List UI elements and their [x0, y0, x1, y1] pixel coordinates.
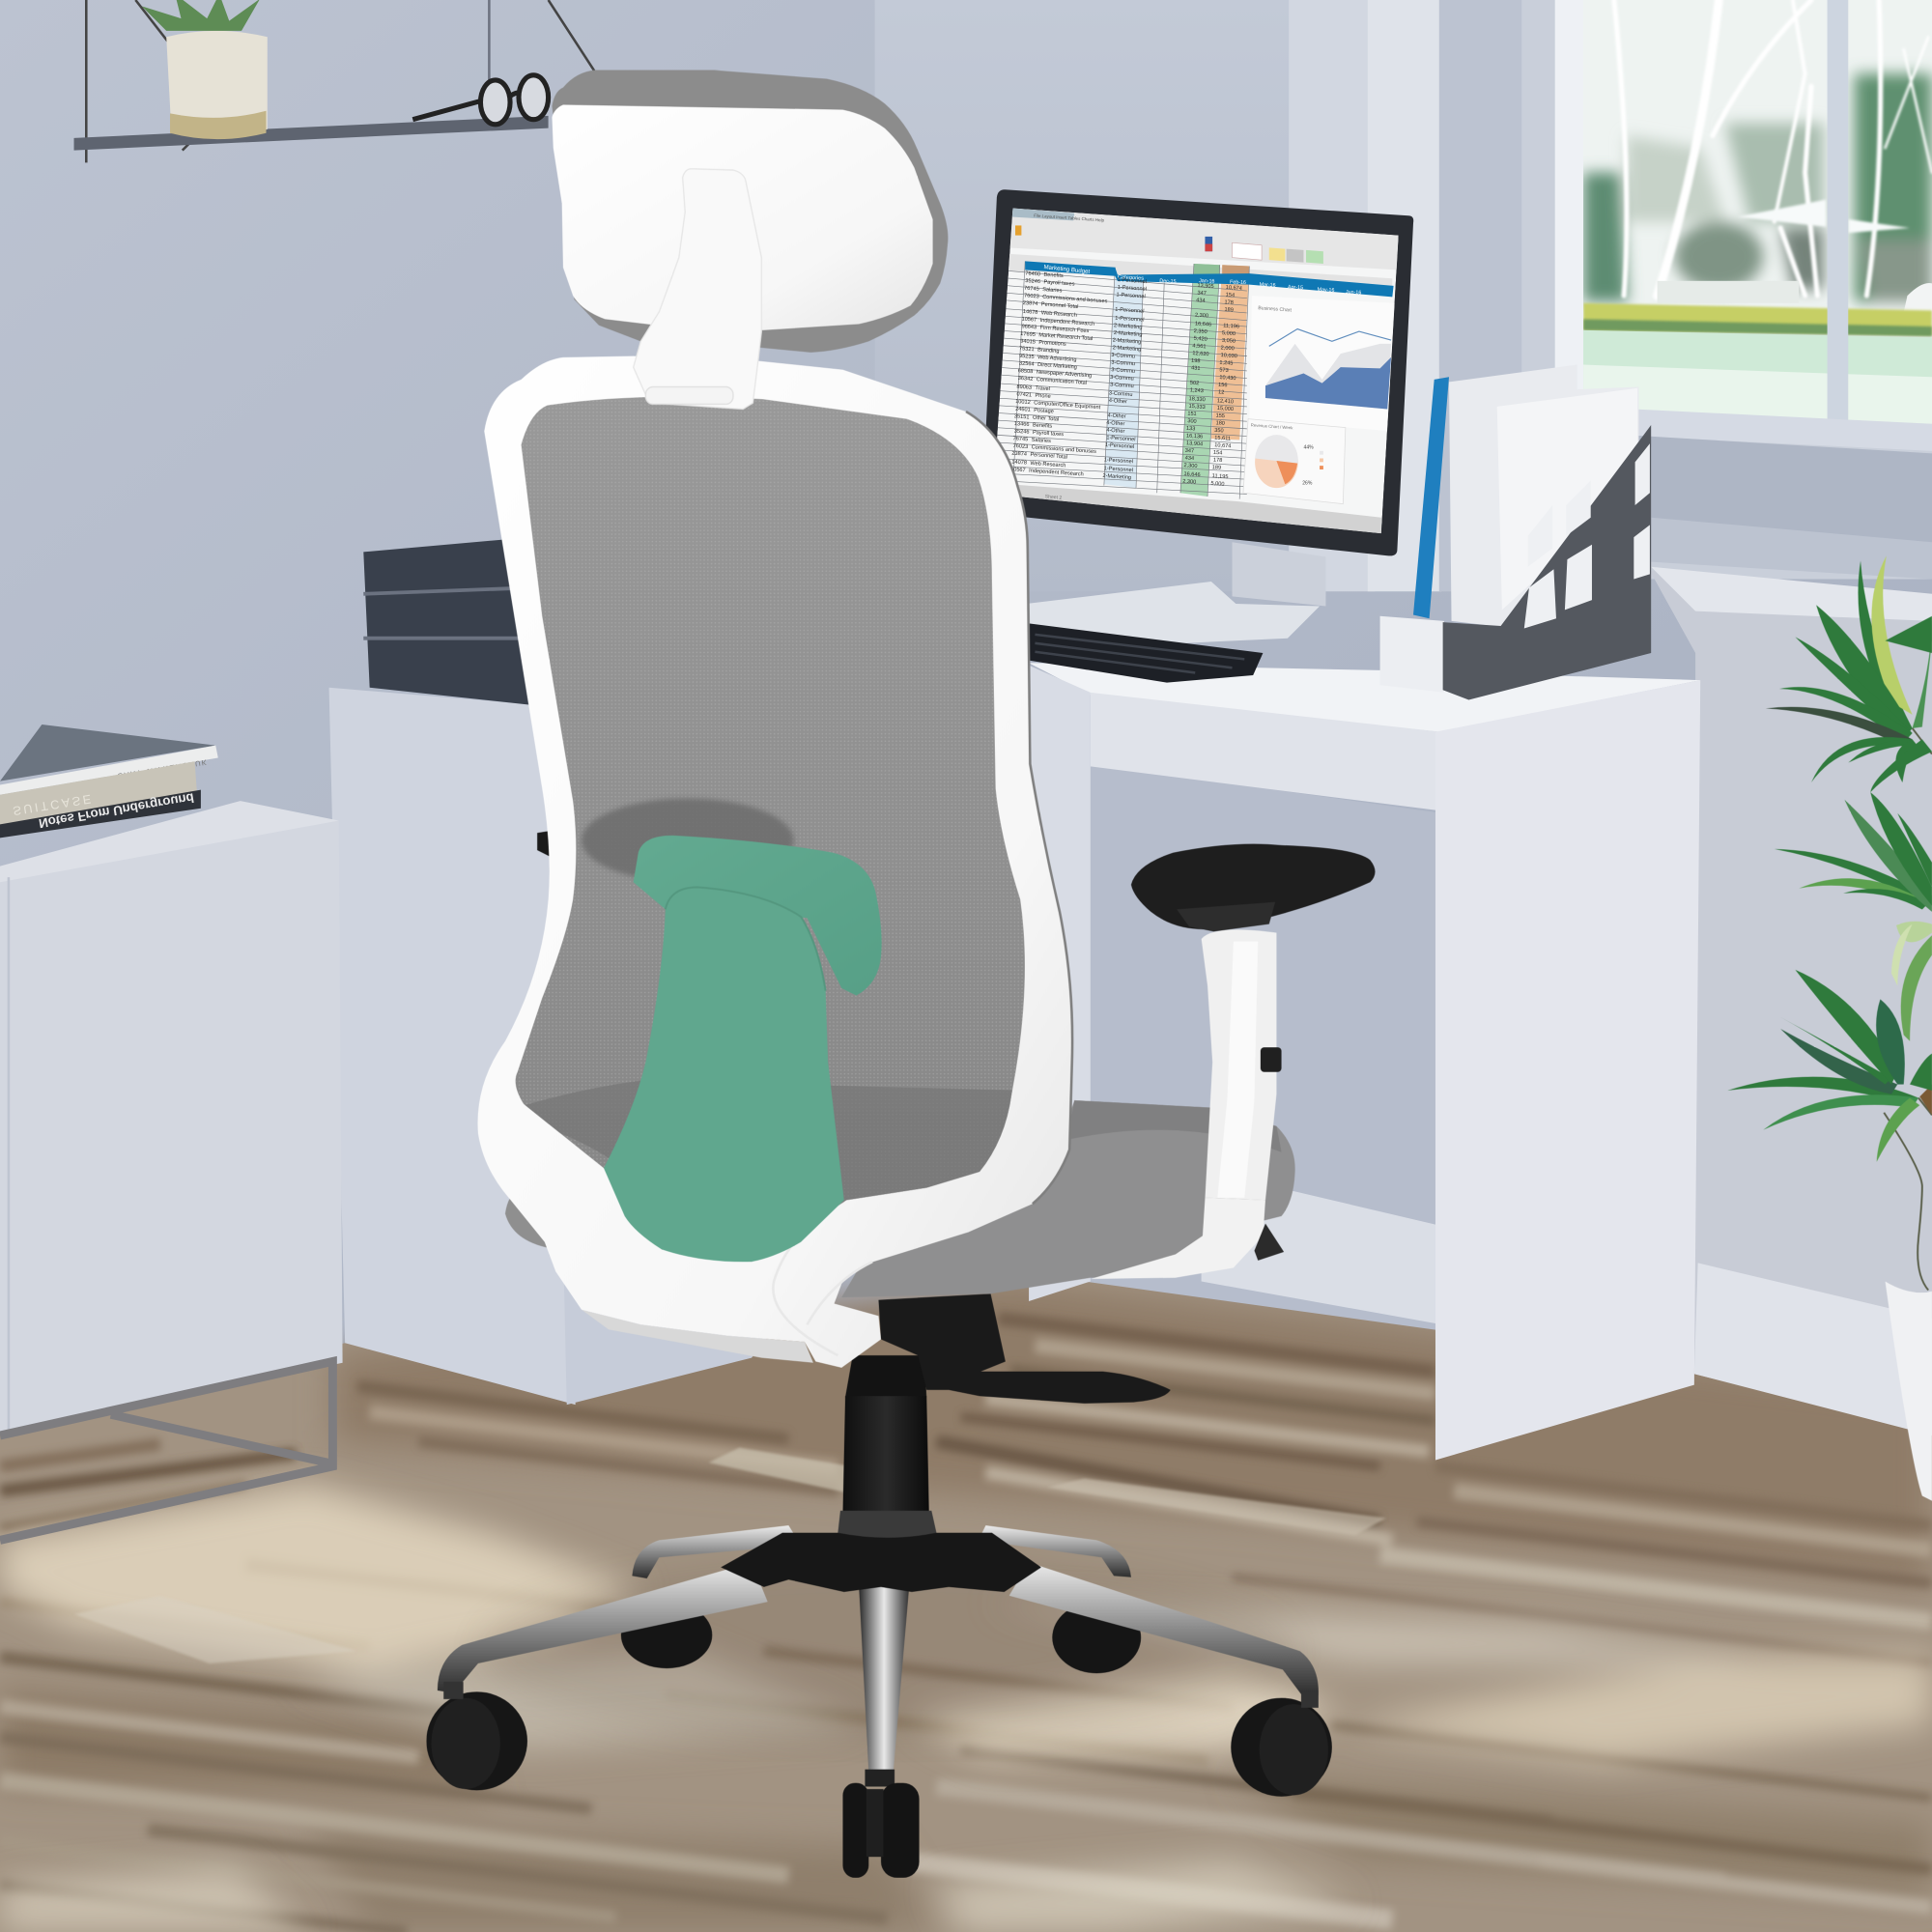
spreadsheet text: 36342 [1017, 376, 1033, 383]
desk [1029, 663, 1700, 1460]
desk organizer [1380, 365, 1651, 699]
spreadsheet text: Firm Research Fees [1039, 326, 1090, 334]
spreadsheet grid [996, 261, 1249, 499]
spreadsheet text: 3-Commu [1110, 375, 1134, 383]
spreadsheet text: 1,243 [1190, 387, 1204, 394]
spreadsheet text: 502 [1190, 381, 1199, 386]
left caster [426, 1682, 527, 1790]
metal legs [0, 1361, 332, 1540]
shell underside ribs [582, 1310, 813, 1363]
icon: potted plant [142, 0, 268, 139]
spreadsheet text: 1-Personnel [1118, 277, 1147, 285]
spreadsheet text: Web Advertising [1037, 355, 1077, 363]
middle leaf cluster [1775, 792, 1932, 942]
spreadsheet text: 156 [1218, 383, 1228, 388]
spreadsheet text: 11,195 [1212, 473, 1229, 480]
right caster [1231, 1690, 1332, 1797]
spreadsheet text: 2-Marketing [1114, 323, 1143, 330]
spreadsheet text: 155 [1215, 413, 1225, 419]
spreadsheet text: May-16 [1317, 287, 1335, 294]
arm post [1202, 929, 1276, 1200]
spreadsheet text: 10567 [1010, 467, 1026, 473]
spreadsheet text: Promotions [1038, 340, 1066, 348]
light plank ends [74, 1448, 1386, 1663]
spreadsheet text: 68508 [1017, 368, 1033, 375]
spreadsheet text: Market Research Total [1038, 332, 1093, 342]
spreadsheet text: 4-Other [1107, 412, 1126, 420]
spreadsheet text: 15,333 [1188, 404, 1206, 411]
spreadsheet text: 1-Personnel [1115, 307, 1145, 315]
spreadsheet text: 347 [1197, 290, 1207, 297]
stems [1884, 728, 1932, 1290]
shell crease [773, 1202, 872, 1355]
spreadsheet text: 35151 [1014, 413, 1030, 420]
book stack: Notes From Underground [38, 790, 195, 831]
spreadsheet text: 11,196 [1223, 323, 1239, 330]
seat seen through mesh [493, 1081, 1023, 1253]
seat [505, 1100, 1295, 1297]
spreadsheet text: 434 [1196, 298, 1206, 304]
magazines in desk: MIRROR LINE [1034, 739, 1050, 837]
spreadsheet text: Payroll taxes [1043, 279, 1075, 288]
icon: glasses [412, 75, 549, 125]
spreadsheet text: 10,674 [1226, 285, 1242, 292]
spreadsheet text: Other Total [1033, 415, 1059, 423]
spreadsheet text: 75321 [1019, 346, 1035, 353]
spreadsheet text: 18,330 [1188, 396, 1206, 403]
sheet tab bar [993, 483, 1381, 533]
spreadsheet text: Apr-15 [1288, 284, 1303, 291]
star base [438, 1525, 1319, 1772]
left white cabinet behind chair [329, 688, 875, 1405]
screen [993, 209, 1399, 533]
spreadsheet text: Salaries [1042, 287, 1063, 294]
spreadsheet text: 07421 [1016, 391, 1032, 398]
left arm peek [537, 831, 552, 858]
spreadsheet text: Feb-16 [1230, 279, 1246, 286]
desk baseboard [1202, 1177, 1441, 1324]
coloured columns [1104, 274, 1144, 488]
wood plank streaks [0, 1319, 1932, 1932]
desk apron [1091, 693, 1440, 810]
spreadsheet text: 198 [1191, 358, 1201, 364]
armrest [1091, 844, 1375, 1279]
spreadsheet text: 12,410 [1217, 398, 1234, 405]
spreadsheet text: 12 [1218, 389, 1225, 396]
spreadsheet text: 32564 [1019, 361, 1035, 368]
back shell [477, 356, 1072, 1368]
spreadsheet text [1010, 264, 1361, 488]
spreadsheet text: 431 [1191, 365, 1201, 372]
spreadsheet text: 76745 [1012, 436, 1028, 442]
spreadsheet text: 16,136 [1186, 433, 1203, 440]
spreadsheet text: 2,350 [1193, 328, 1208, 335]
monitor [982, 189, 1413, 643]
frame edge mesh wrap [966, 412, 1072, 1204]
spreadsheet text: 12,620 [1192, 351, 1209, 357]
spreadsheet text: 16,646 [1195, 321, 1211, 328]
spreadsheet text: Payroll taxes [1033, 430, 1064, 438]
lumbar shadow [582, 799, 793, 882]
papers [1449, 365, 1638, 627]
spreadsheet text: 178 [1213, 457, 1223, 464]
spreadsheet text: 347 [1185, 448, 1194, 454]
spreadsheet text: 15,611 [1214, 436, 1231, 442]
spreadsheet text: 1-Personnel [1115, 316, 1145, 324]
blue binder [1413, 377, 1449, 618]
spreadsheet text: Marketing Budget [1043, 264, 1091, 275]
spreadsheet text: Commissions and bonuses [1042, 295, 1108, 304]
spreadsheet text: Travel [1035, 385, 1050, 392]
spreadsheet text: 2,300 [1182, 479, 1196, 486]
spreadsheet text: 573 [1219, 367, 1229, 374]
pie chart: Revenue Chart / Week [1251, 422, 1293, 430]
spreadsheet text: Web Research [1030, 461, 1066, 469]
lumbar lower panel [604, 887, 844, 1262]
spreadsheet text: 2-Marketing [1114, 330, 1143, 338]
lower leaf cluster [1727, 924, 1932, 1162]
spreadsheet text: 14078 [1011, 460, 1027, 467]
spreadsheet text: Direct Marketing [1037, 362, 1077, 371]
spreadsheet text: 1-Personnel [1105, 442, 1134, 450]
spreadsheet text: 76023 [1012, 443, 1028, 450]
screen: Sheet 2 [1044, 494, 1063, 501]
spreadsheet text: 96643 [1021, 324, 1037, 330]
pie chart [1243, 419, 1346, 504]
spreadsheet text: Benefits [1033, 422, 1053, 430]
spreadsheet text: Salaries [1031, 438, 1051, 444]
spreadsheet text: 2,300 [1195, 312, 1208, 319]
spreadsheet text: 95235 [1019, 354, 1035, 360]
spreadsheet header band [1025, 261, 1394, 297]
spreadsheet text: 35246 [1025, 278, 1040, 285]
spreadsheet text: 3,050 [1222, 338, 1236, 345]
spreadsheet text: Personnel Total [1041, 301, 1079, 310]
spreadsheet text: 10,030 [1220, 353, 1237, 359]
spreadsheet text: 1-Personnel [1106, 435, 1136, 442]
dark trays [363, 537, 529, 705]
spreadsheet text: 1-Personnel [1118, 285, 1147, 293]
right wall panel [1651, 567, 1932, 1435]
spreadsheet text: 10,674 [1214, 442, 1232, 449]
area chart: Business Chart [1258, 305, 1293, 314]
ribbon controls [1015, 213, 1323, 264]
headrest [552, 71, 948, 353]
gas cylinder [838, 1355, 936, 1538]
right baseboard [1694, 1263, 1932, 1435]
wall shelf with plant and glasses [74, 0, 596, 162]
floor [0, 1282, 1932, 1932]
spreadsheet text: 2-Marketing [1112, 345, 1141, 353]
arm lower bracket [1091, 1198, 1265, 1279]
keyboard [1029, 623, 1263, 683]
magazines in desk [1033, 721, 1087, 1263]
spreadsheet text: 2-Marketing [1112, 338, 1141, 346]
book stack [0, 724, 218, 838]
spreadsheet text: 14678 [1023, 309, 1038, 316]
spreadsheet text: 133 [1186, 426, 1196, 432]
spreadsheet text: 3-Commu [1111, 360, 1135, 367]
spreadsheet text: 154 [1226, 293, 1235, 298]
spreadsheet text: 300 [1187, 418, 1197, 425]
desk top [1029, 663, 1700, 732]
spreadsheet text: 3-Commu [1109, 390, 1133, 398]
book stack: SUITCASE [12, 791, 95, 818]
spreadsheet text: 4,561 [1192, 343, 1207, 350]
spreadsheet text: Independent Research [1039, 318, 1094, 327]
spreadsheet text: Dec-15 [1159, 278, 1177, 285]
spreadsheet text: 189 [1212, 465, 1221, 471]
spreadsheet text: Benefits [1043, 272, 1064, 279]
spreadsheet text: 23874 [1011, 451, 1027, 458]
spreadsheet text: 10012 [1015, 399, 1031, 406]
left sideboard [0, 724, 343, 1540]
lumbar support [604, 836, 882, 1262]
spreadsheet text: Jan-16 [1199, 278, 1215, 285]
spreadsheet text: 35246 [1014, 429, 1030, 436]
spreadsheet text: 13,905 [1197, 283, 1214, 290]
spreadsheet text: Postage [1034, 408, 1054, 414]
spreadsheet text: 5,000 [1210, 481, 1225, 488]
column headers [1008, 254, 1392, 288]
spreadsheet text: 154 [1213, 450, 1223, 456]
spreadsheet text: 4-Other [1106, 428, 1125, 435]
spreadsheet text: Communication Total [1037, 377, 1087, 386]
spreadsheet text: Computer/Office Equipment [1034, 400, 1101, 411]
area chart [1258, 303, 1395, 431]
spreadsheet text: Independent Research [1029, 469, 1084, 477]
spreadsheet text: 13466 [1014, 421, 1030, 428]
spreadsheet text: 5,420 [1193, 336, 1208, 343]
top leaf cluster [1766, 555, 1932, 792]
garden view [1583, 0, 1932, 425]
plant [1727, 555, 1932, 1501]
base hub [721, 1533, 1041, 1592]
spreadsheet text: 350 [1214, 428, 1224, 434]
spreadsheet text: Mar-16 [1259, 282, 1276, 289]
spreadsheet text: 3-Commu [1111, 367, 1135, 375]
spreadsheet text: Commissions and bonuses [1031, 444, 1096, 455]
spreadsheet text: Branding [1037, 348, 1060, 355]
spreadsheet text: Categories [1118, 274, 1144, 282]
spreadsheet text: 13,904 [1186, 440, 1203, 447]
spreadsheet text: 1,245 [1219, 360, 1234, 367]
monitor bezel [982, 189, 1413, 555]
back mesh [493, 397, 1025, 1262]
desk right leg [1435, 680, 1700, 1460]
spreadsheet text: 151 [1187, 411, 1197, 417]
spreadsheet text: 434 [1185, 455, 1194, 462]
spreadsheet text: 1-Personnel [1104, 457, 1133, 465]
tilt mechanism and lever [878, 1293, 1171, 1404]
spreadsheet text: 178 [1224, 299, 1234, 306]
spreadsheet text: 180 [1215, 420, 1225, 427]
spreadsheet text: Newspaper Advertising [1037, 369, 1092, 379]
spreadsheet text: 3-Commu [1111, 353, 1135, 360]
floor shadow [480, 1559, 1293, 1744]
headrest post [634, 169, 761, 409]
pot [1886, 1282, 1932, 1501]
upper darker wood zone [0, 1282, 1932, 1932]
file holder [1443, 425, 1651, 699]
spreadsheet text: 189 [1224, 307, 1234, 313]
arm pad [1131, 844, 1375, 929]
spreadsheet text: 5,000 [1222, 330, 1236, 337]
spreadsheet text: 10,430 [1219, 375, 1236, 382]
book stack: GARY VAYNERCHUK [117, 757, 209, 781]
spreadsheet text: 17695 [1020, 331, 1036, 338]
spreadsheet text: 4-Other [1109, 398, 1127, 405]
spreadsheet text: 89063 [1016, 384, 1032, 391]
monitor stand [1026, 542, 1325, 643]
spreadsheet text: Personnel Total [1030, 452, 1067, 461]
spreadsheet text: 76745 [1024, 286, 1039, 293]
lumbar upper wing [634, 836, 882, 996]
seat label tag [1254, 1224, 1284, 1261]
spreadsheet text: 24601 [1015, 407, 1031, 413]
ribbon controls: File Layout Insert Tables Charts Help [1034, 213, 1105, 223]
spreadsheet text: 3-Commu [1110, 382, 1134, 389]
spreadsheet text: 4-Other [1106, 420, 1125, 427]
spreadsheet text: 2-Marketing [1102, 473, 1131, 481]
spreadsheet text: 76460 [1025, 270, 1040, 277]
spreadsheet text: 1-Personnel [1116, 292, 1146, 299]
spreadsheet text: 10567 [1021, 317, 1037, 324]
sunlight patches [0, 1485, 1932, 1932]
spreadsheet text: Jun-16 [1346, 290, 1361, 296]
spreadsheet text: 2,000 [1220, 345, 1235, 352]
pie chart: 26% [1302, 480, 1313, 486]
spreadsheet text: 2,300 [1183, 463, 1198, 469]
spreadsheet text: 23874 [1023, 300, 1038, 307]
spreadsheet text: 1-Personnel [1104, 466, 1133, 473]
wall [0, 0, 1932, 1479]
desk left support [1029, 666, 1091, 1301]
spreadsheet text: 15,000 [1217, 406, 1234, 412]
spreadsheet text: Phone [1035, 393, 1051, 400]
spreadsheet text: 76023 [1024, 293, 1039, 299]
front caster [842, 1770, 920, 1878]
window [1521, 0, 1932, 579]
rear casters [621, 1602, 1141, 1673]
back wall under desk [1084, 764, 1441, 1331]
chair [426, 71, 1375, 1878]
spreadsheet text: 16,646 [1183, 471, 1201, 478]
pie chart: 44% [1303, 444, 1314, 450]
spreadsheet text: 94015 [1020, 339, 1036, 346]
spreadsheet text: Web Research [1041, 310, 1077, 319]
